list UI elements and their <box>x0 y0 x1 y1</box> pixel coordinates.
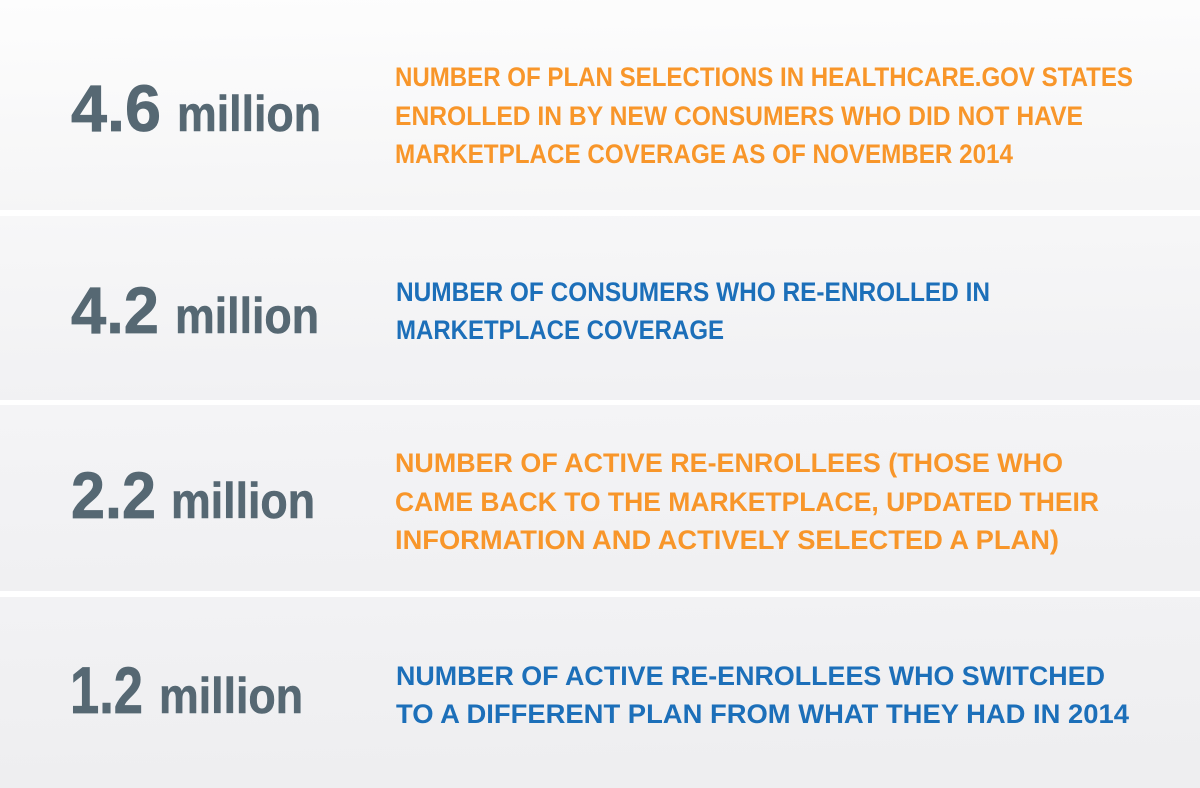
description: active re-enrollees: INFORMATION AND ACTIVELY SELECTED A PLAN) <box>395 525 1059 555</box>
description: plan selections <box>395 62 1133 169</box>
statistic: 4.2 million <box>71 273 319 347</box>
panel: 2.2 million active re-enrollees <box>0 405 1200 591</box>
description: re-enrolled consumers: MARKETPLACE COVERAGE <box>396 315 724 345</box>
statistic: 4.6 million: 4.6 <box>71 71 161 145</box>
panel: 1.2 million switched plans <box>0 597 1200 788</box>
statistic: 1.2 million: million <box>159 668 303 724</box>
statistic: 2.2 million <box>71 458 315 532</box>
description: active re-enrollees: CAME BACK TO THE MARKETPLACE, UPDATED THEIR <box>395 487 1099 517</box>
description: active re-enrollees <box>395 448 1099 555</box>
statistic: 1.2 million <box>70 653 303 727</box>
description: switched plans: NUMBER OF ACTIVE RE-ENROLLEES WHO SWITCHED <box>396 661 1105 691</box>
statistic: 4.2 million: million <box>175 288 319 344</box>
statistic: 4.6 million: million <box>177 86 321 142</box>
panel: 4.2 million re-enrolled <box>0 216 1200 400</box>
statistic: 2.2 million: 2.2 <box>71 458 156 532</box>
description: re-enrolled consumers <box>396 277 990 345</box>
description: plan selections: NUMBER OF PLAN SELECTIONS IN HEALTHCARE.GOV STATES <box>395 62 1133 92</box>
statistic: 1.2 million: 1.2 <box>70 653 143 727</box>
description: plan selections: ENROLLED IN BY NEW CONSUMERS WHO DID NOT HAVE <box>395 101 1083 131</box>
description: switched plans: TO A DIFFERENT PLAN FROM WHAT THEY HAD IN 2014 <box>396 699 1129 729</box>
description: re-enrolled consumers: NUMBER OF CONSUMERS WHO RE-ENROLLED IN <box>396 277 990 307</box>
description: switched plans <box>396 661 1129 729</box>
statistic: 4.6 million <box>71 71 321 145</box>
statistic: 4.2 million: 4.2 <box>71 273 159 347</box>
description: active re-enrollees: NUMBER OF ACTIVE RE-ENROLLEES (THOSE WHO <box>395 448 1063 478</box>
description: plan selections: MARKETPLACE COVERAGE AS OF NOVEMBER 2014 <box>395 139 1013 169</box>
panel: 4.6 million plan selections <box>0 0 1200 210</box>
statistic: 2.2 million: million <box>171 473 315 529</box>
